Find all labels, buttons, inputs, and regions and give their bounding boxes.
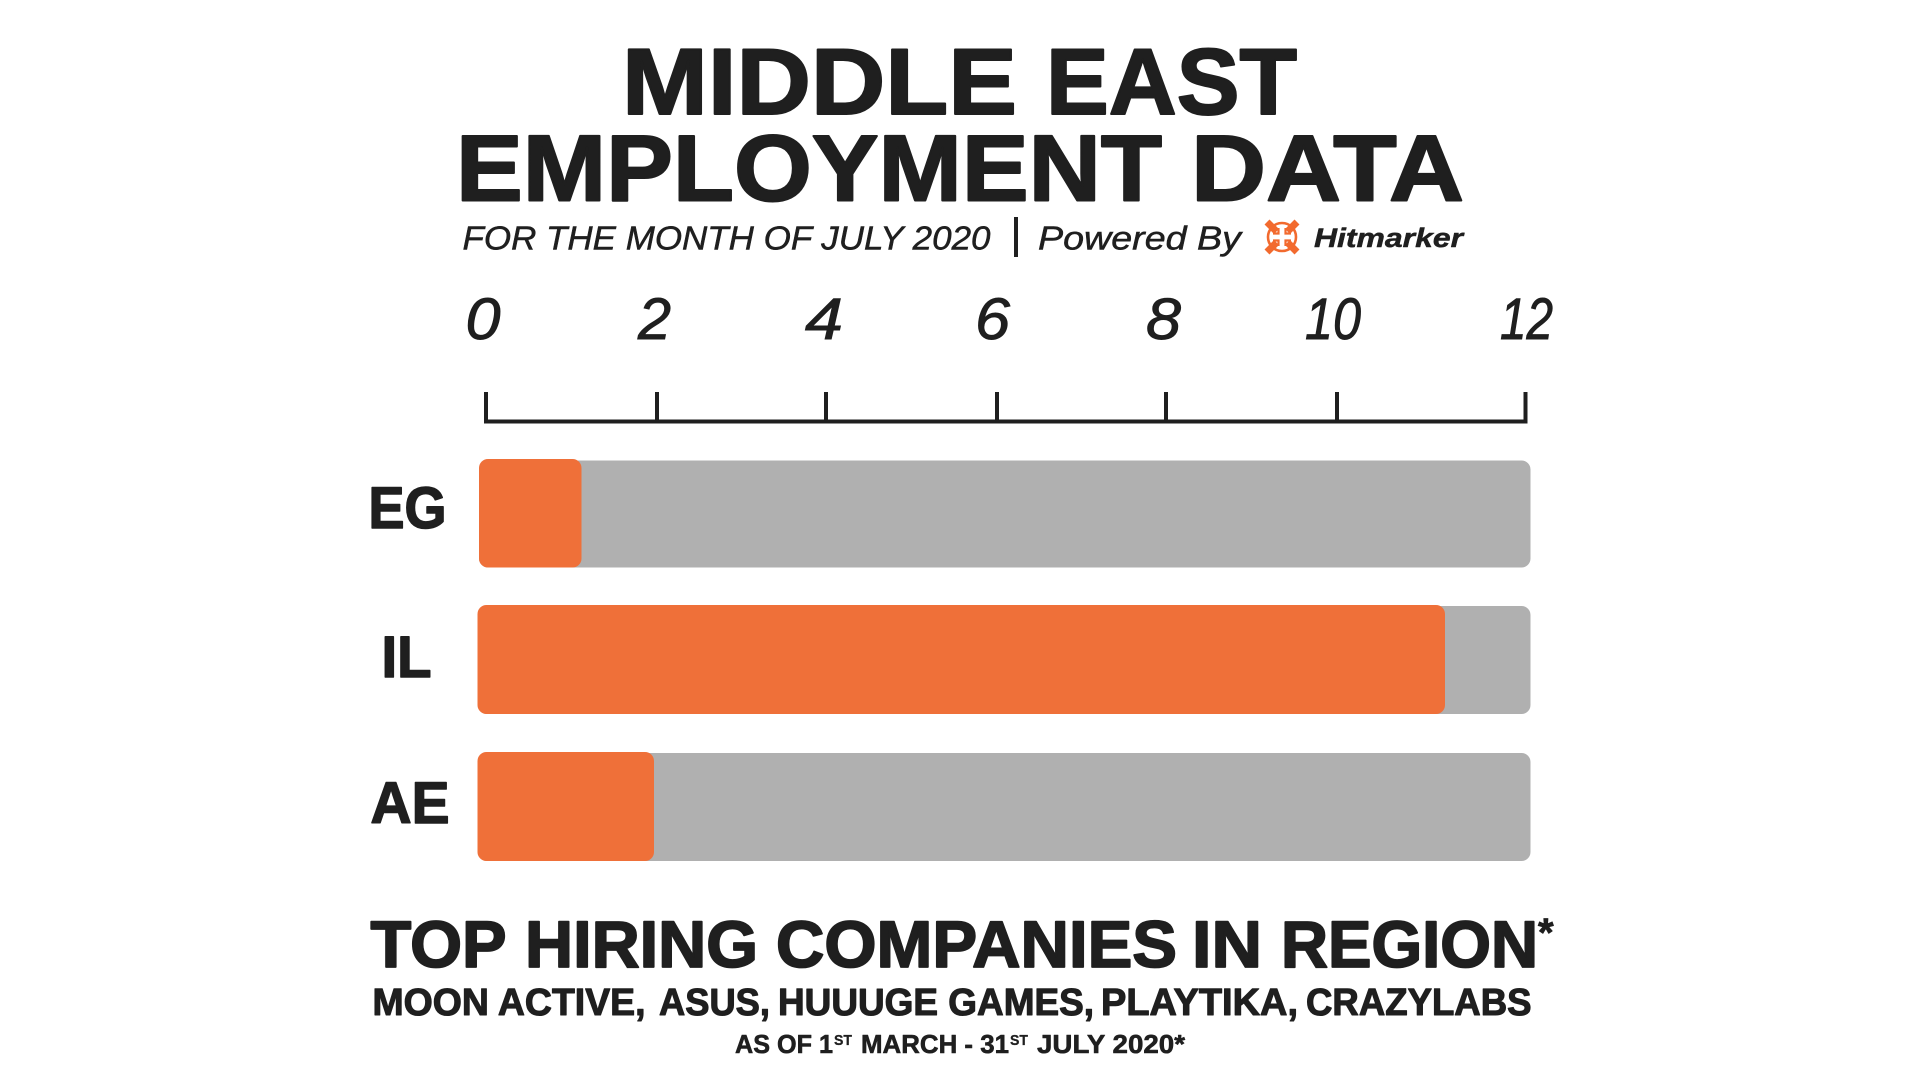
heading: top hiring companies: IN — [1192, 907, 1262, 981]
bar: AE — [478, 752, 1530, 861]
axis labels: 4 — [805, 287, 843, 352]
date note: MARCH - 31 — [861, 1029, 1009, 1059]
axis labels — [466, 287, 1553, 352]
date note: JULY 2020* — [1037, 1029, 1186, 1059]
title: DATA — [1191, 116, 1464, 220]
axis labels: 12 — [1500, 287, 1553, 352]
company list: MOON ACTIVE, — [372, 982, 646, 1024]
company list: CRAZYLABS — [1306, 982, 1532, 1024]
heading: top hiring companies: TOP — [370, 907, 506, 981]
bar: EG — [479, 459, 1530, 568]
title: MIDDLE — [622, 29, 1017, 134]
subtitle: month: FOR THE MONTH OF JULY 2020 — [462, 220, 991, 256]
company list: HUUUGE GAMES, — [778, 982, 1094, 1024]
company list — [372, 982, 1532, 1024]
date note — [735, 1029, 1186, 1059]
hitmarker wordmark: Hitmarker — [1314, 223, 1465, 253]
axis labels: 2 — [637, 287, 671, 352]
bar: IL — [478, 605, 1530, 714]
powered by: Powered By — [1038, 220, 1244, 256]
heading: top hiring companies: HIRING — [525, 907, 758, 981]
title: EMPLOYMENT — [456, 116, 1162, 220]
heading: top hiring companies: COMPANIES — [776, 907, 1177, 981]
heading: top hiring companies: REGION — [1281, 907, 1538, 981]
icon: hitmarker logo — [1267, 222, 1297, 252]
axis labels: 0 — [466, 287, 500, 352]
divider — [1014, 217, 1018, 257]
title — [456, 29, 1464, 220]
title: EAST — [1046, 29, 1297, 134]
company list: ASUS, — [659, 982, 770, 1024]
heading: top hiring companies: * — [1538, 911, 1554, 955]
axis labels: 10 — [1305, 287, 1361, 352]
date note: ST — [834, 1032, 852, 1049]
label: IL: IL — [382, 625, 432, 690]
company list: PLAYTIKA, — [1101, 982, 1298, 1024]
date note: ST — [1010, 1032, 1028, 1049]
axis — [486, 392, 1526, 422]
heading: top hiring companies — [370, 907, 1554, 981]
axis labels: 8 — [1146, 287, 1181, 352]
label: AE: AE — [370, 771, 450, 836]
label: EG: EG — [368, 476, 446, 541]
axis labels: 6 — [975, 287, 1011, 352]
date note: AS OF 1 — [735, 1029, 833, 1059]
